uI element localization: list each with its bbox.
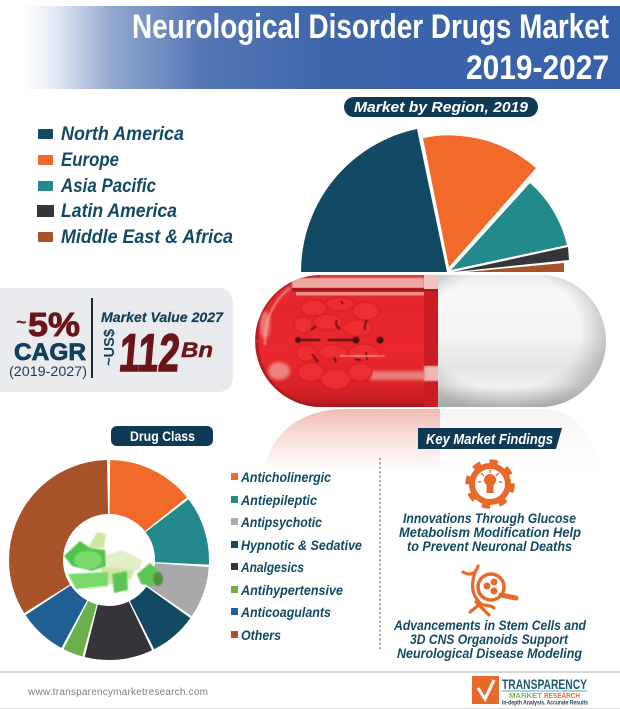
heading: Drug Class: Drug Class <box>130 428 195 444</box>
logo: Transparency Market Research: RESEARCH <box>544 691 580 700</box>
capsule pill with brain <box>255 275 606 407</box>
heading: Key Market Findings: Key Market Findings <box>426 431 553 448</box>
icon: green pills <box>64 532 163 593</box>
CAGR value <box>9 306 87 379</box>
region legend: Europe <box>61 150 119 171</box>
drug class legend: Others <box>241 628 281 643</box>
market value <box>101 309 224 383</box>
pill reflection <box>265 409 600 472</box>
finding 1 text: Innovations Through Glucose <box>403 511 576 526</box>
CAGR value: CAGR <box>14 339 86 366</box>
CAGR value: (2019-2027) <box>9 363 87 379</box>
right edge stripes of red cap <box>424 291 438 407</box>
finding 1 text: to Prevent Neuronal Deaths <box>407 539 572 554</box>
icon: magnifier with DNA <box>463 566 516 615</box>
finding 1 text: Metabolism Modification Help <box>399 525 581 540</box>
header banner with title <box>24 6 620 89</box>
region pie chart <box>301 129 569 272</box>
drug class legend: Antihypertensive <box>240 583 343 598</box>
finding 2 text: Advancements in Stem Cells and <box>393 618 587 633</box>
CAGR value: ~ <box>16 312 27 332</box>
finding 2 text <box>393 618 587 661</box>
drug class legend: Anticoagulants <box>240 605 331 620</box>
drug class legend: Analgesics <box>240 560 304 575</box>
region legend: Latin America <box>61 201 177 222</box>
finding 1 text <box>399 511 581 554</box>
logo: Transparency Market Research <box>472 676 589 706</box>
drug class legend <box>231 470 362 643</box>
drug class donut chart <box>36 487 182 633</box>
CAGR and market value panel <box>0 288 233 392</box>
region legend: North America <box>61 124 184 145</box>
CAGR value: 5% <box>28 306 80 343</box>
region legend <box>37 124 233 248</box>
logo: Transparency Market Research: In-depth Analysis. Accurate Results <box>502 700 589 706</box>
drug class legend: Antipsychotic <box>240 515 322 530</box>
website url: www.transparencymarketresearch.com <box>27 687 208 698</box>
drug class legend: Anticholinergic <box>240 470 331 485</box>
market value: ~US$ <box>101 328 118 366</box>
region legend: Asia Pacific <box>60 176 156 197</box>
logo: Transparency Market Research: TRANSPARENCY <box>502 676 587 692</box>
market value: Market Value 2027 <box>101 309 224 325</box>
icon: gear with light bulb <box>468 462 512 506</box>
heading: Drug Class <box>111 426 213 446</box>
left rim shading <box>257 276 320 340</box>
market value: Bn <box>181 339 213 362</box>
icon: brain inside pill <box>294 297 385 389</box>
market value: 112 <box>117 324 182 383</box>
heading: Market by Region: Market by Region, 2019 <box>354 99 529 116</box>
top pale band <box>292 278 424 288</box>
drug class legend: Antiepileptic <box>240 493 317 508</box>
finding 2 text: Neurological Disease Modeling <box>397 646 583 661</box>
region legend: Middle East & Africa <box>61 227 233 248</box>
finding 2 text: 3D CNS Organoids Support <box>410 632 568 647</box>
drug class legend: Hypnotic & Sedative <box>241 538 362 553</box>
logo: Transparency Market Research: MARKET <box>509 691 542 700</box>
